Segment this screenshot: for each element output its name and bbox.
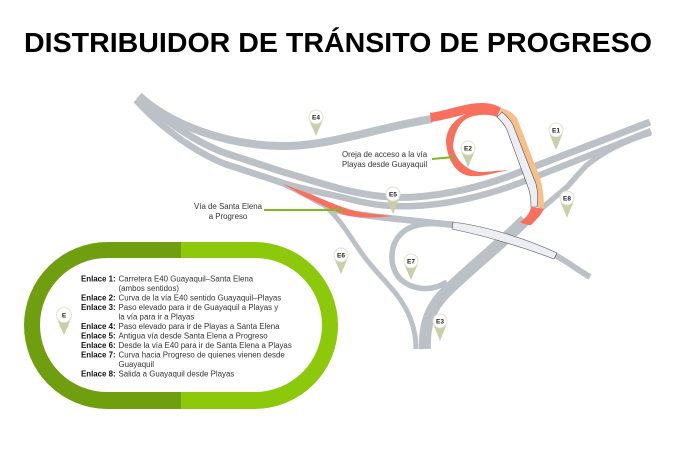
pin E5: E5: [389, 191, 397, 198]
pin E6: [334, 248, 348, 274]
legend pin E: [56, 308, 72, 335]
callout line: ear: [432, 157, 454, 159]
legend text: Guayaquil: [118, 360, 154, 369]
legend pin E: E: [62, 312, 67, 319]
label: Santa Elena road: Vía de Santa Elena: [194, 202, 263, 211]
legend text: Paso elevado para ir de Playas a Santa Elena: [118, 322, 280, 331]
legend panel: [24, 242, 338, 409]
pin E7: E7: [407, 258, 415, 265]
pin E8: [560, 191, 574, 218]
orange ramp: [500, 108, 544, 208]
pin E3: [433, 314, 447, 341]
legend text: la vía para ir a Playas: [118, 312, 194, 322]
road: exit past bridge: [553, 254, 590, 277]
road network map: [136, 96, 651, 349]
legend text: (ambos sentidos): [118, 284, 179, 293]
red ear ramp: [430, 103, 508, 176]
road: E40 lower lane: [136, 100, 651, 206]
pin E4: [309, 110, 323, 136]
legend inner white: [40, 258, 322, 392]
callout line: Santa Elena: [264, 209, 344, 211]
legend text: Curva de la vía E40 sentido Guayaquil–Playas: [118, 294, 281, 302]
pin E3: E3: [436, 318, 444, 325]
pin E2: E2: [464, 145, 472, 152]
legend text: Enlace 7:: [81, 350, 116, 360]
legend text: Curva hacia Progreso de quienes vienen desde: [118, 350, 285, 360]
legend text: Carretera E40 Guayaquil–Santa Elena: [118, 274, 254, 284]
pin E7: [404, 254, 418, 280]
legend text: Desde la vía E40 para ir de Santa Elena a Playas: [118, 341, 292, 350]
red Santa Elena road: [283, 184, 393, 218]
legend ring: light green: [181, 242, 338, 409]
red ramp bottom: [520, 207, 544, 225]
legend text: Enlace 5:: [81, 332, 116, 340]
road: E40 upper lane: [139, 96, 650, 197]
label: ear access: Oreja de acceso a la vía: [342, 150, 428, 159]
pin E1: [549, 123, 563, 150]
title: DISTRIBUIDOR DE TRÁNSITO DE PROGRESO: [24, 27, 652, 58]
legend ring: dark green: [24, 242, 181, 409]
legend text: Enlace 8:: [81, 370, 116, 378]
road: E4 branch: [139, 96, 432, 146]
road: E7 curve: [392, 223, 453, 288]
legend text: Enlace 6:: [81, 341, 116, 350]
label: ear access: Playas desde Guayaquil: [342, 160, 427, 169]
pin E1: E1: [552, 127, 560, 134]
legend text: Salida a Guayaquil desde Playas: [118, 370, 234, 378]
pin E2: [461, 141, 475, 167]
legend text: Antigua vía desde Santa Elena a Progreso: [118, 332, 268, 340]
label: Santa Elena road: a Progreso: [209, 212, 248, 221]
legend text: Enlace 2:: [81, 294, 116, 302]
legend text: Enlace 4:: [81, 322, 116, 331]
road: E3 ramp: [425, 220, 525, 349]
road: old road toward bridge: [136, 100, 453, 225]
pin E5: [386, 187, 400, 214]
pin E8: E8: [563, 195, 571, 202]
road: E8 ramp: [525, 133, 651, 222]
white bridge E7: [452, 222, 557, 259]
legend text: Paso elevado para ir de Guayaquil a Playas y: [118, 303, 278, 312]
legend text: Enlace 3:: [81, 303, 116, 312]
legend text: Enlace 1:: [81, 274, 116, 284]
pin E4: E4: [312, 114, 320, 121]
white bridge E3: [497, 112, 538, 207]
road: E6 link: [325, 206, 416, 349]
pin E6: E6: [337, 252, 345, 259]
